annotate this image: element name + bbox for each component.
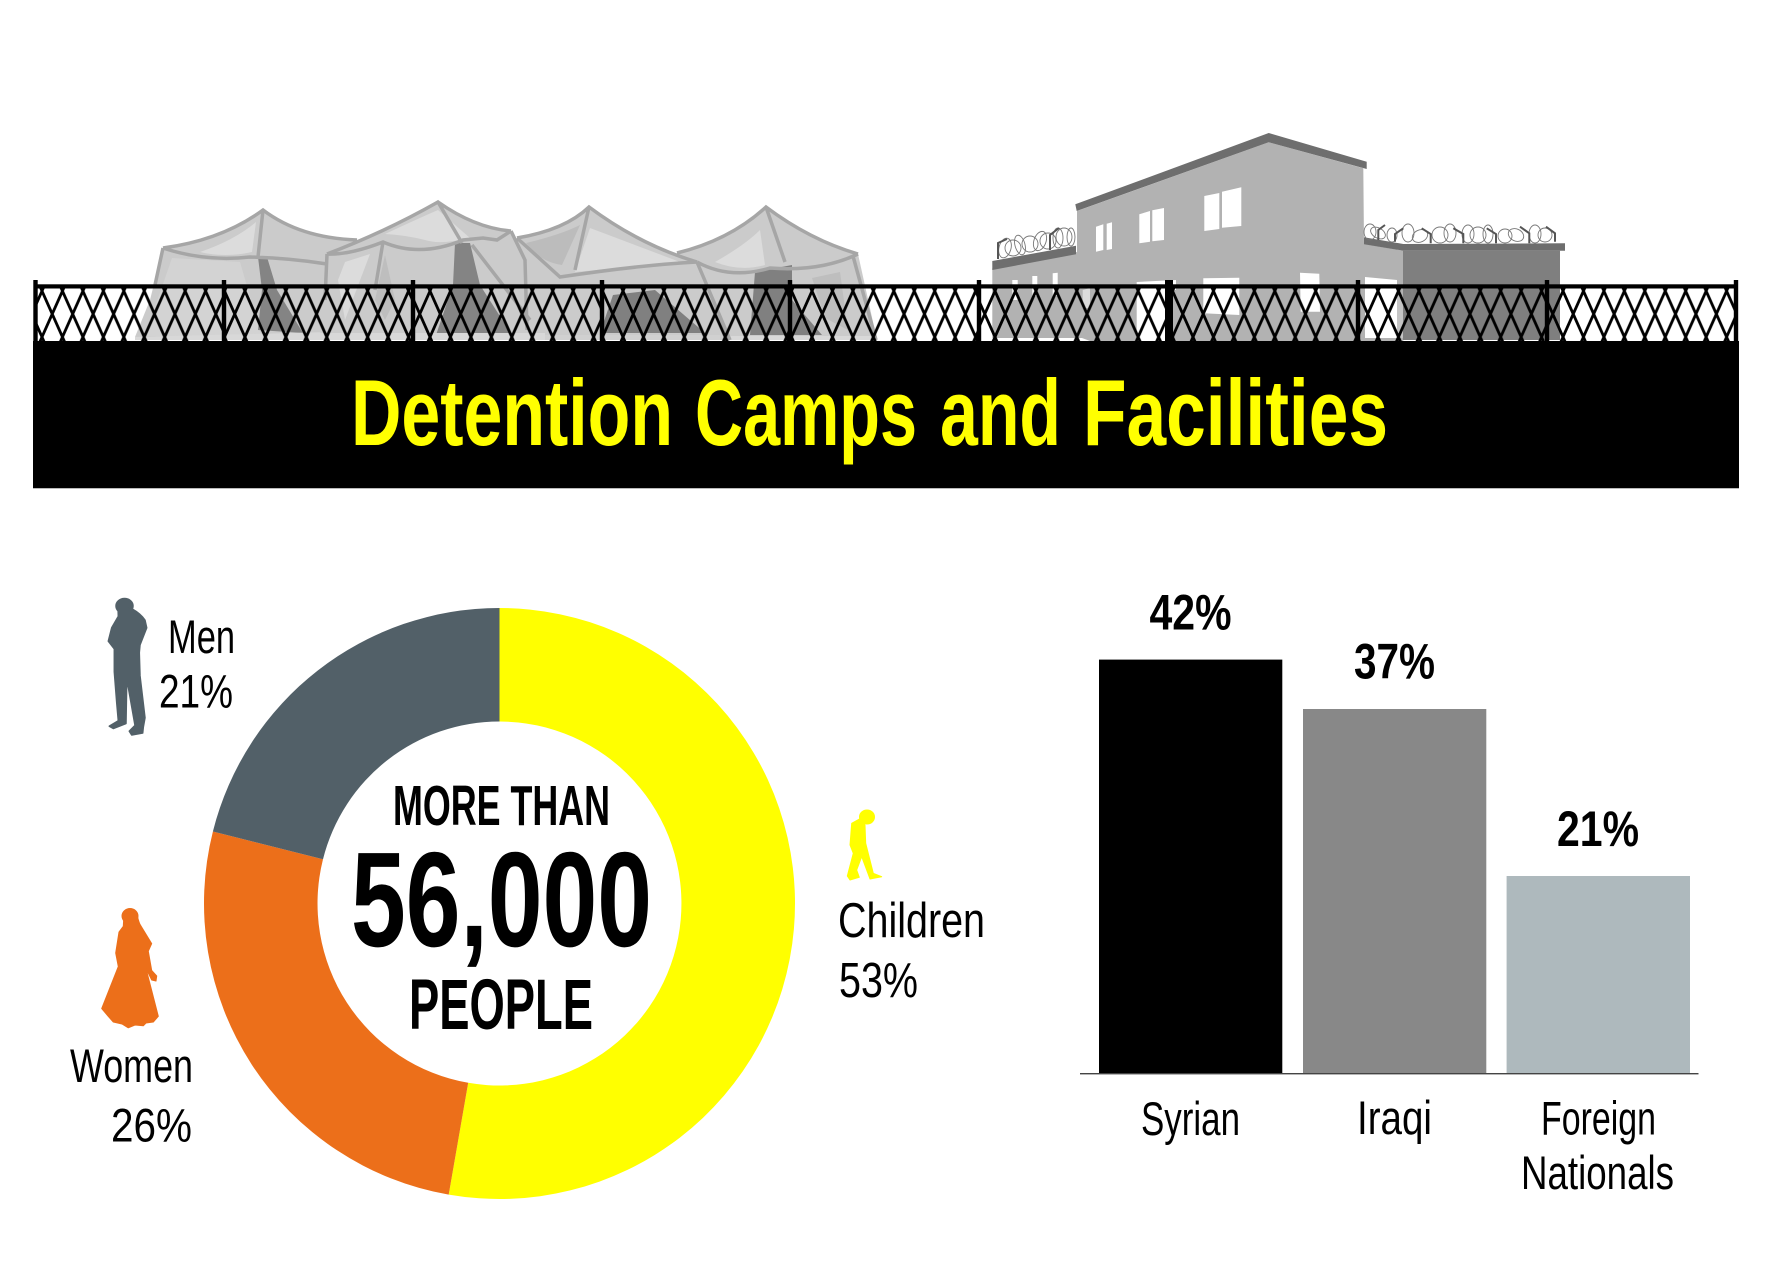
heading bbox=[351, 360, 1388, 465]
bar: Syrian bbox=[1099, 584, 1282, 1145]
bar: Syrian: 42% bbox=[1150, 584, 1232, 640]
label: men bbox=[159, 610, 235, 718]
donut center text bbox=[351, 774, 652, 1045]
bar: Syrian: Syrian bbox=[1141, 1092, 1240, 1145]
heading: and bbox=[940, 360, 1061, 465]
icon: woman silhouette bbox=[102, 908, 158, 1028]
icon: man silhouette bbox=[108, 598, 147, 735]
donut center text: 56,000 bbox=[351, 824, 652, 975]
label: children: Children bbox=[838, 894, 985, 948]
illustration: chain link fence bbox=[33, 280, 1738, 341]
segment: women 26% bbox=[204, 832, 468, 1195]
segment: children 53% bbox=[449, 608, 795, 1199]
title banner bbox=[33, 341, 1739, 489]
bar: Iraqi: Iraqi bbox=[1357, 1091, 1432, 1144]
heading: Facilities bbox=[1083, 360, 1388, 465]
bar: Iraqi: 37% bbox=[1354, 634, 1435, 690]
label: women: Women bbox=[70, 1039, 193, 1092]
building windows and doors bbox=[1012, 187, 1403, 341]
label: men: 21% bbox=[159, 664, 233, 718]
razor wire: left bbox=[997, 228, 1075, 259]
bar: Foreign Nationals: 21% bbox=[1557, 801, 1639, 857]
tent 2 bbox=[320, 202, 545, 340]
building roofs bbox=[992, 133, 1565, 270]
label: children bbox=[838, 894, 985, 1008]
donut center text: PEOPLE bbox=[409, 966, 593, 1045]
segment: men 21% bbox=[213, 608, 500, 859]
label: men: Men bbox=[168, 610, 235, 663]
illustration: detention building bbox=[992, 133, 1565, 341]
label: children: 53% bbox=[839, 954, 918, 1008]
building walls bbox=[992, 142, 1560, 341]
bar: Foreign Nationals: Foreign bbox=[1541, 1092, 1656, 1144]
tent 1 bbox=[135, 210, 357, 340]
bar chart: nationality bbox=[1080, 584, 1698, 1199]
donut chart: population breakdown bbox=[204, 608, 795, 1199]
label: women: 26% bbox=[111, 1098, 192, 1152]
bar: Foreign Nationals bbox=[1507, 801, 1690, 1199]
donut center text: MORE THAN bbox=[393, 774, 610, 838]
tent 3 bbox=[517, 207, 730, 340]
bar: Iraqi bbox=[1303, 634, 1486, 1144]
label: women bbox=[70, 1039, 193, 1152]
heading: Detention bbox=[351, 360, 673, 465]
razor wire: right bbox=[1364, 224, 1555, 245]
bar: Foreign Nationals: Nationals bbox=[1521, 1146, 1674, 1199]
tent 4 bbox=[660, 207, 877, 340]
heading: Camps bbox=[695, 360, 917, 465]
illustration: tents bbox=[135, 202, 877, 340]
icon: child silhouette bbox=[847, 810, 882, 880]
